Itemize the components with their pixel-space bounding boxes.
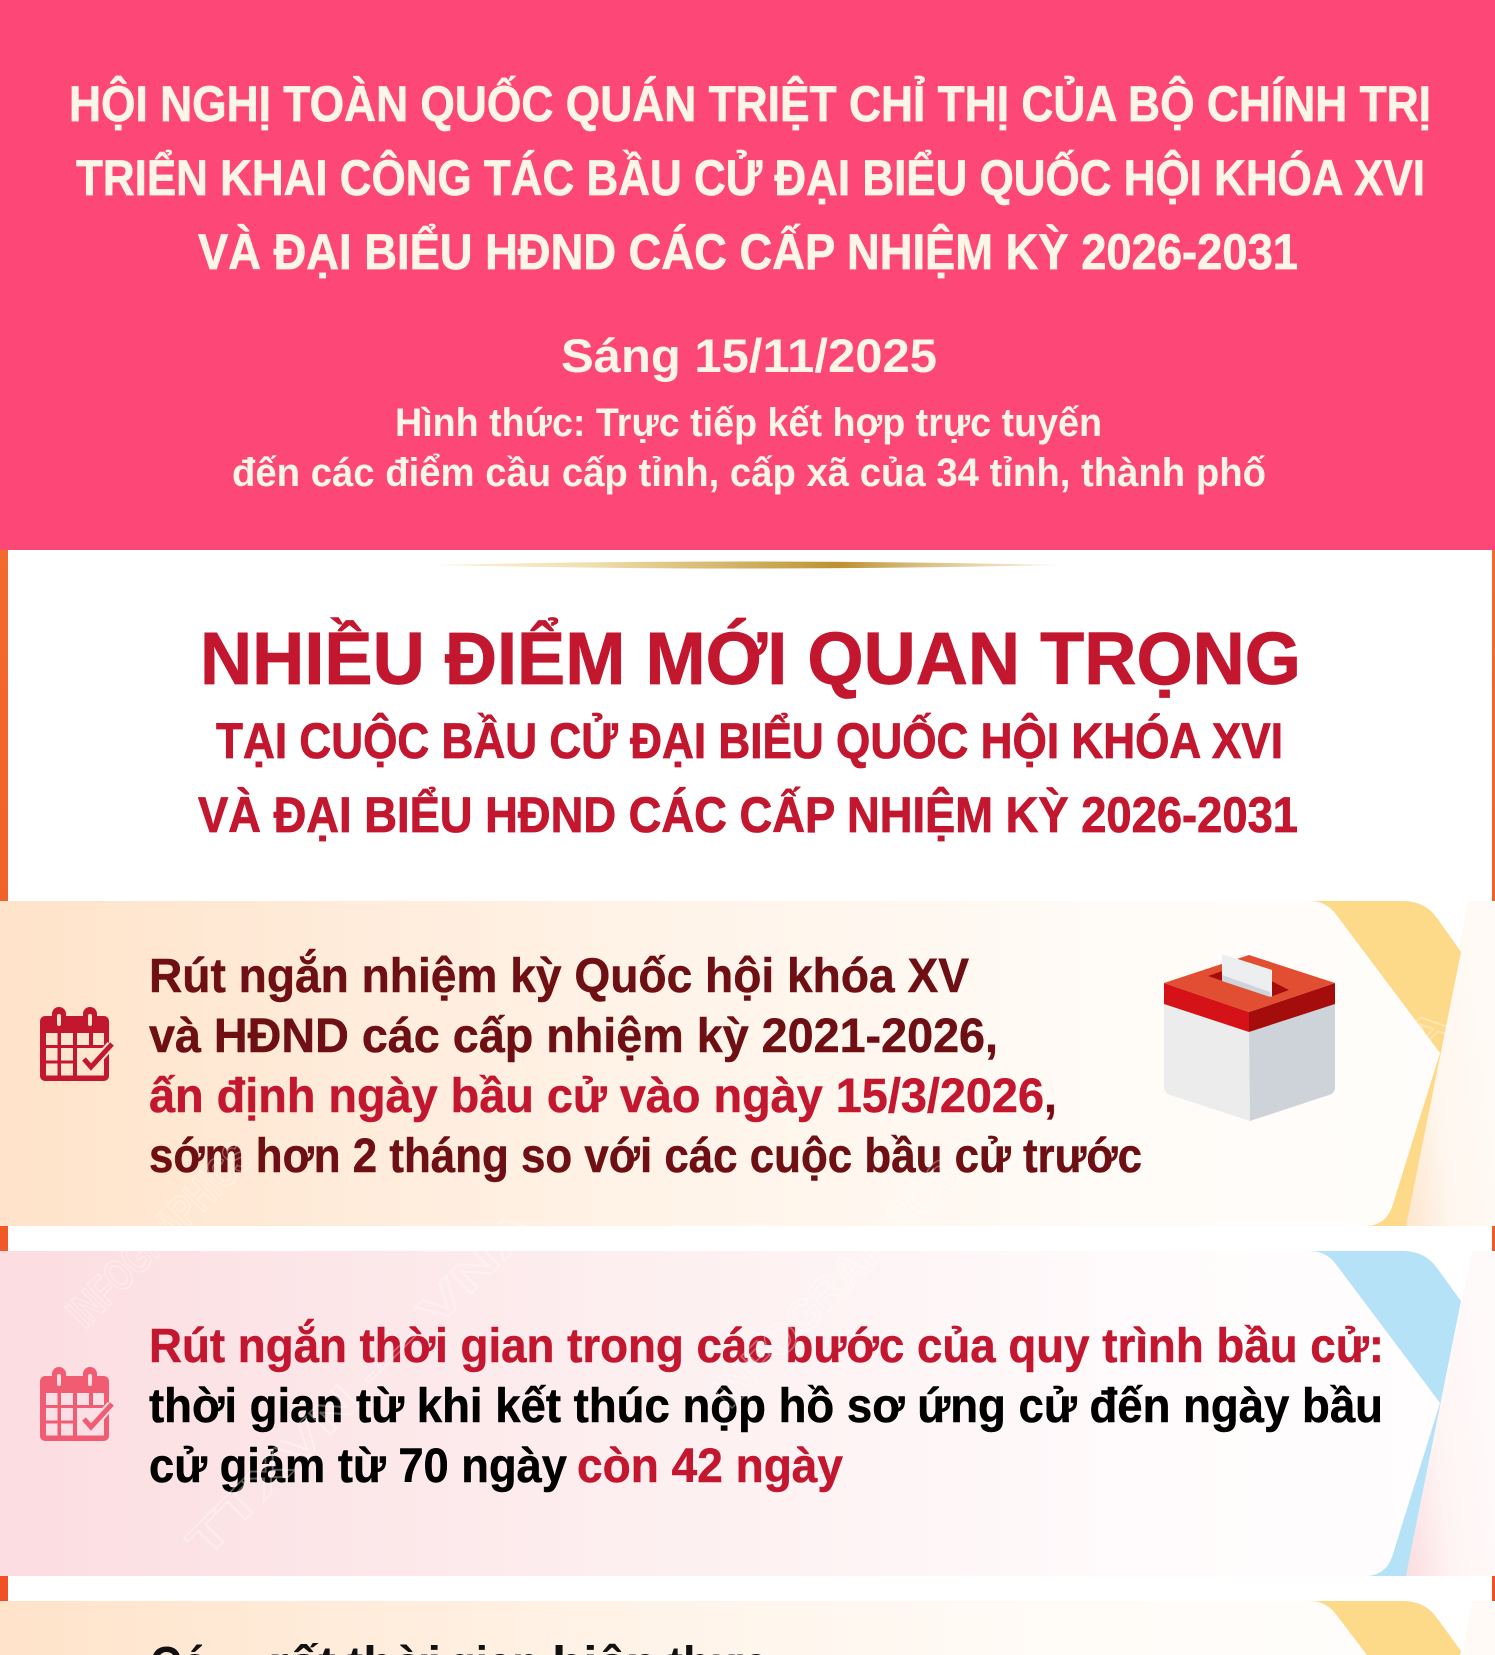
header format note <box>232 401 1266 495</box>
header format note: đến các điểm cầu cấp tỉnh, cấp xã của 34 tỉnh, thành phố <box>232 451 1266 495</box>
main heading: NHIỀU ĐIỂM MỚI QUAN TRỌNG <box>200 617 1301 700</box>
left side accent stripe <box>0 549 8 1655</box>
card 2 text: Rút ngắn thời gian trong các bước của quy trình bầu cử: <box>149 1318 1384 1373</box>
card 2 text: còn 42 ngày <box>577 1440 843 1493</box>
icon: ballot box <box>1164 954 1335 1121</box>
card 2 text: cử giảm từ 70 ngày <box>149 1440 567 1493</box>
main heading: TẠI CUỘC BẦU CỬ ĐẠI BIỂU QUỐC HỘI KHÓA XVI <box>216 712 1283 769</box>
card 2 text: thời gian từ khi kết thúc nộp hồ sơ ứng cử đến ngày bầu <box>149 1380 1383 1433</box>
header date: Sáng 15/11/2025 <box>561 329 937 382</box>
watermark: INFOGRAPHICS <box>702 1149 970 1417</box>
card 1 right panel <box>1406 901 1495 1226</box>
watermark: TTXVN — VNA <box>1142 1000 1460 1317</box>
card 2 calendar icon <box>40 1367 112 1441</box>
gold divider <box>431 562 1061 568</box>
watermark: INFOGRAPHICS <box>57 1133 262 1337</box>
card 1 background <box>0 901 1440 1226</box>
panel: shortened term <box>0 901 1495 1226</box>
header title: VÀ ĐẠI BIỂU HĐND CÁC CẤP NHIỆM KỲ 2026-2031 <box>198 224 1298 280</box>
card 2 text <box>149 1318 1384 1493</box>
card 3 background <box>0 1601 1367 1655</box>
panel: third card, cropped <box>0 1601 1495 1655</box>
panel: shortened election steps <box>0 1251 1495 1576</box>
card 1 text: và HĐND các cấp nhiệm kỳ 2021-2026, <box>149 1010 998 1063</box>
card 3 text <box>153 1643 761 1655</box>
card 1 calendar icon <box>40 1007 112 1081</box>
card 1 yellow tab <box>1300 901 1461 1226</box>
header banner <box>0 0 1495 550</box>
right side accent stripe <box>1492 549 1495 1655</box>
watermark <box>57 1000 1460 1567</box>
watermark: TTXVN — VNA <box>177 1200 544 1567</box>
card 2 blue tab <box>1300 1251 1461 1576</box>
main heading <box>198 617 1301 843</box>
card 3 yellow tab <box>1300 1601 1461 1655</box>
header title <box>69 75 1431 280</box>
card 2 background <box>0 1251 1440 1576</box>
header format note: Hình thức: Trực tiếp kết hợp trực tuyến <box>395 401 1102 445</box>
card 1 text: ấn định ngày bầu cử vào ngày 15/3/2026, <box>149 1070 1057 1123</box>
card 1 text: sớm hơn 2 tháng so với các cuộc bầu cử trước <box>149 1130 1142 1183</box>
card 2 right panel <box>1406 1251 1495 1576</box>
card 1 text: Rút ngắn nhiệm kỳ Quốc hội khóa XV <box>149 948 969 1003</box>
main heading: VÀ ĐẠI BIỂU HĐND CÁC CẤP NHIỆM KỲ 2026-2031 <box>198 787 1298 843</box>
card 3 right panel <box>1462 1601 1495 1655</box>
card 1 text <box>149 948 1142 1183</box>
